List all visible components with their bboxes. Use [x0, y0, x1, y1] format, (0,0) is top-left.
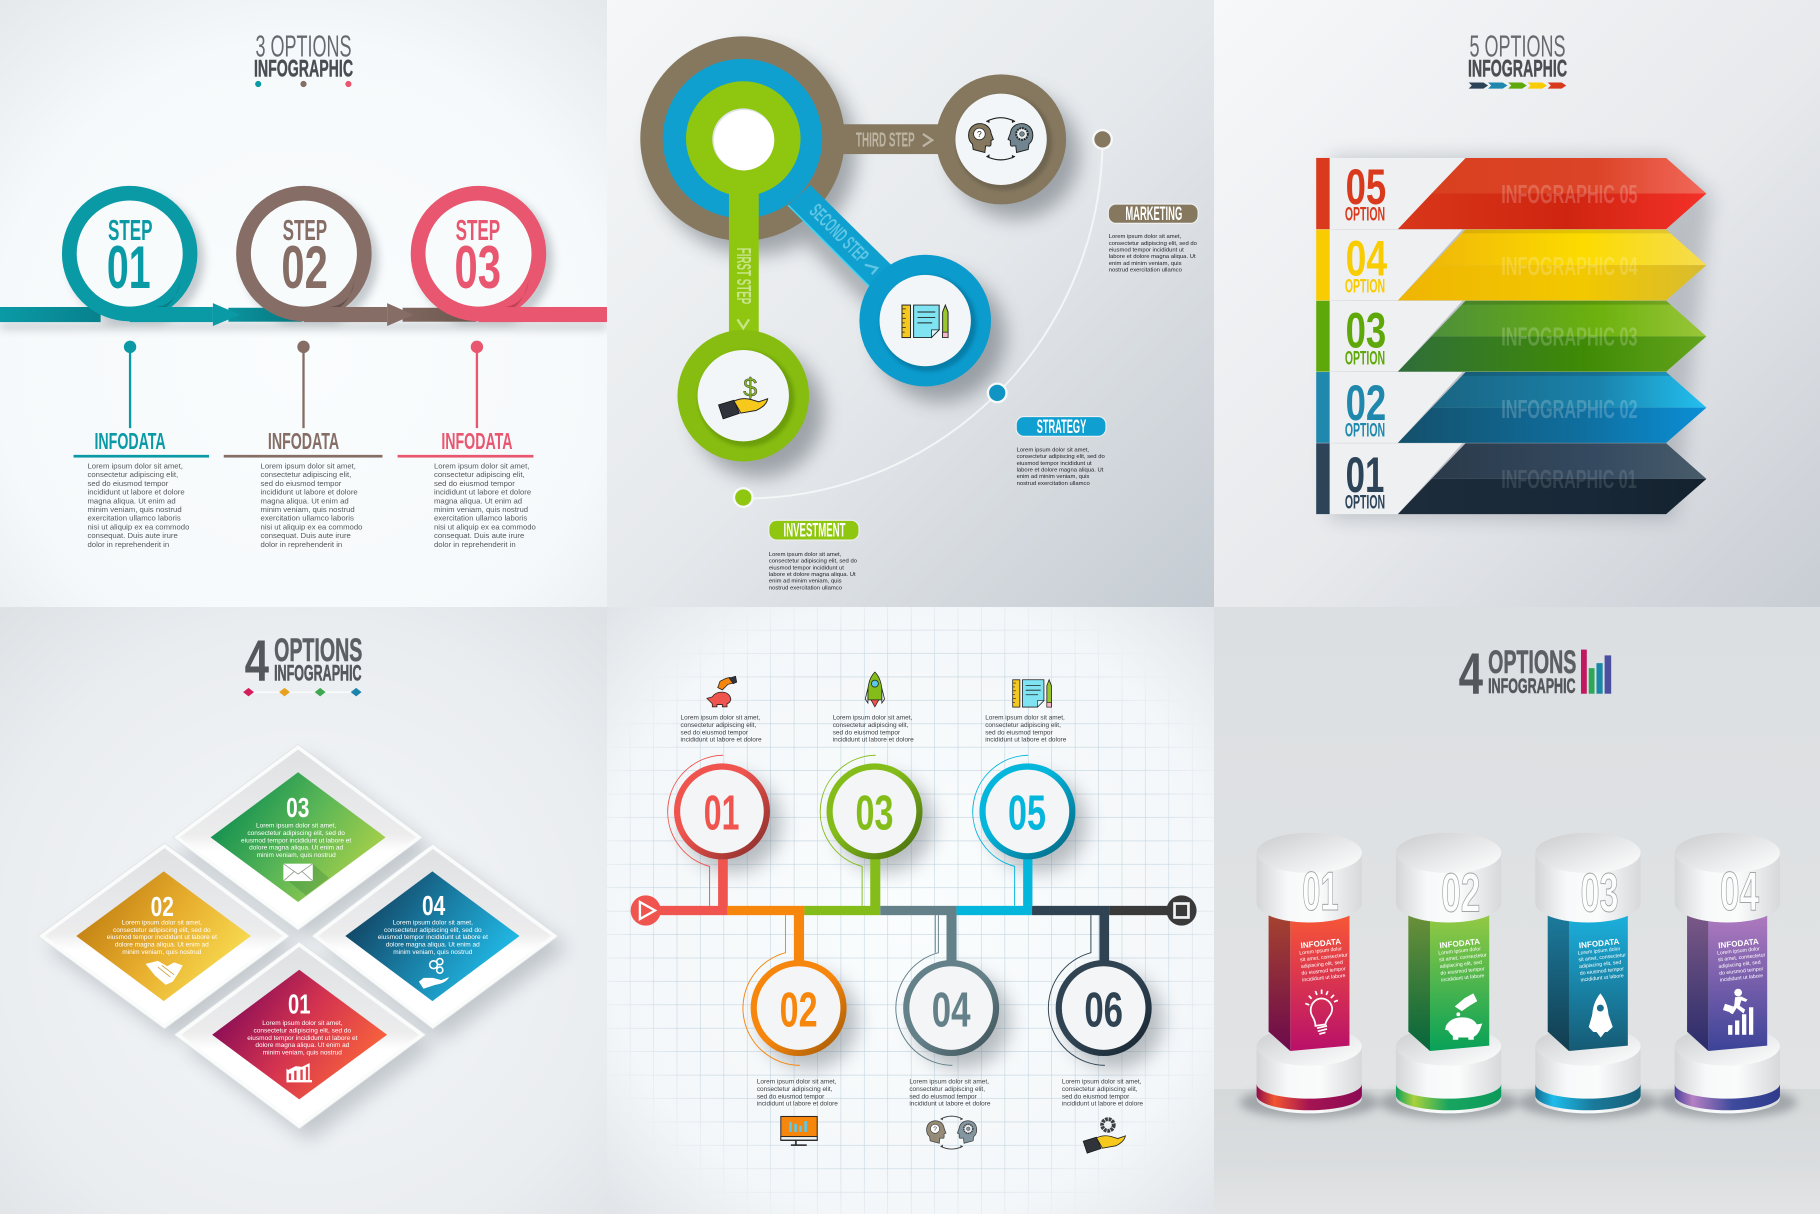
diamond 01: consectetur adipiscing elit, sed do — [254, 1027, 352, 1034]
cylinder 04: 04 — [1720, 860, 1759, 922]
label: strategy: eiusmod tempor incididunt ut — [1017, 461, 1092, 467]
title: 5 OPTIONS — [1469, 29, 1566, 64]
diamond 01 — [174, 942, 426, 1129]
label: marketing: MARKETING — [1125, 203, 1182, 225]
diamond 02: eiusmod tempor incididunt ut labore et — [107, 934, 217, 941]
captions bottom row: Lorem ipsum dolor sit amet, — [909, 1079, 989, 1086]
column: infodata 2: minim veniam, quis nostrud — [261, 505, 355, 514]
second step arm — [663, 59, 991, 386]
ribbon step 02: 02 — [281, 234, 328, 301]
icon: hand with dollar: $ — [743, 374, 757, 402]
panel: 4 options cylinders — [1214, 607, 1820, 1214]
column: infodata 1: incididunt ut labore et dolore — [87, 488, 185, 497]
ribbon step 01: STEP — [108, 215, 153, 247]
captions bottom row: sed do eiusmod tempor — [909, 1093, 978, 1100]
grid — [607, 607, 1214, 1214]
panel: 3 options infographic — [0, 0, 607, 607]
column: infodata 1: consequat. Duis aute irure — [87, 531, 178, 540]
row 01 — [1316, 443, 1706, 514]
ribbon step 02: STEP — [283, 215, 327, 247]
node 06 — [1048, 914, 1152, 1065]
captions bottom row: incididunt ut labore et dolore — [1062, 1101, 1143, 1108]
wall — [1214, 607, 1820, 1089]
captions top row: sed do eiusmod tempor — [681, 729, 749, 736]
row 05 — [1316, 158, 1706, 229]
row 04: 04 — [1346, 230, 1387, 287]
cylinder 01 — [1257, 833, 1362, 1113]
title: INFOGRAPHIC — [254, 56, 353, 83]
cylinder 03: 03 — [1581, 862, 1619, 924]
label: strategy: Lorem ipsum dolor sit amet, — [1017, 447, 1089, 453]
row 03 — [1316, 301, 1706, 372]
captions top row: Lorem ipsum dolor sit amet, — [833, 715, 913, 722]
row 01: OPTION — [1345, 492, 1385, 514]
column: infodata 3: consequat. Duis aute irure — [434, 531, 524, 540]
captions top row: incididunt ut labore et dolore — [833, 737, 914, 744]
stack shadow — [1330, 157, 1711, 519]
cylinder 02: INFODATA — [1439, 937, 1481, 950]
diamond 02 — [38, 843, 290, 1029]
label: investment: eiusmod tempor incididunt ut — [769, 565, 844, 571]
node 01: 01 — [704, 787, 739, 841]
drop shadows under the ribbon — [0, 200, 607, 326]
column: infodata 3 — [398, 341, 536, 549]
cylinder 02: 02 — [1441, 862, 1480, 924]
column: infodata 3: INFODATA — [441, 428, 513, 454]
cylinder 02: do eiusmod tempor — [1440, 966, 1485, 977]
cylinder 01: do eiusmod tempor — [1301, 966, 1346, 977]
column: infodata 2: sed do eiusmod tempor — [261, 479, 342, 488]
cylinder 01: sit amet, consectetur — [1300, 952, 1348, 963]
diamond 03 — [173, 744, 423, 930]
captions top row: incididunt ut labore et dolore — [681, 737, 762, 744]
background — [0, 607, 607, 1214]
first step arm: FIRST STEP — [732, 248, 754, 304]
column: infodata 2: consequat. Duis aute irure — [261, 531, 351, 540]
label: investment — [769, 520, 859, 591]
label: strategy: enim ad minim veniam, quis — [1017, 474, 1089, 480]
captions bottom row: sed do eiusmod tempor — [757, 1093, 825, 1100]
column: infodata 3: minim veniam, quis nostrud — [434, 505, 528, 514]
icon: hand with dollar — [718, 374, 768, 419]
panel: six step timeline — [607, 607, 1214, 1214]
column: infodata 2: nisi ut aliquip ex ea commodo — [261, 522, 362, 531]
title — [243, 629, 362, 696]
label: strategy: STRATEGY — [1037, 416, 1086, 438]
title: OPTIONS — [1488, 644, 1576, 680]
node 04: 04 — [932, 983, 971, 1037]
diamond 03: dolore magna aliqua. Ut enim ad — [249, 845, 344, 852]
diamond 03: 03 — [286, 792, 309, 823]
captions bottom row: consectetur adipiscing elit, — [1062, 1086, 1138, 1093]
column: infodata 3: exercitation ullamco laboris — [434, 514, 527, 523]
diamond 04: eiusmod tempor incididunt ut labore et — [378, 934, 488, 941]
captions bottom row: consectetur adipiscing elit, — [909, 1086, 985, 1093]
diamond 04: dolore magna aliqua. Ut enim ad — [386, 942, 480, 949]
first step arm — [677, 81, 809, 461]
diamond 01: Lorem ipsum dolor sit amet, — [262, 1020, 343, 1027]
captions bottom row: consectetur adipiscing elit, — [757, 1086, 833, 1093]
column: infodata 3: sed do eiusmod tempor — [434, 479, 515, 488]
column: infodata 1 — [74, 341, 209, 549]
label: marketing: eiusmod tempor incididunt ut — [1109, 247, 1184, 253]
curved connector — [743, 139, 1103, 499]
cylinder 01: adipiscing elit, sed — [1301, 960, 1343, 970]
cylinder 04 — [1675, 833, 1780, 1113]
background — [607, 607, 1214, 1214]
node 03: 03 — [856, 787, 893, 841]
title: INFOGRAPHIC — [274, 661, 362, 686]
diamond 03: minim veniam, quis nostrud — [257, 852, 336, 859]
ribbon step 03 — [418, 193, 607, 322]
icon: light bulb — [1305, 989, 1338, 1034]
column: infodata 3: nisi ut aliquip ex ea commodo — [434, 522, 536, 531]
label: marketing: consectetur adipiscing elit, sed do — [1109, 241, 1198, 247]
icon: hand with gear — [1083, 1119, 1125, 1153]
row 02 — [1316, 372, 1706, 443]
column: infodata 3: magna aliqua. Ut enim ad — [434, 496, 522, 505]
column: infodata 2 — [224, 341, 382, 549]
column: infodata 1: INFODATA — [94, 428, 166, 454]
title — [1468, 29, 1567, 89]
cylinder 01: incididunt ut labore — [1302, 973, 1346, 984]
title: 4 — [1459, 642, 1483, 707]
column: infodata 2: INFODATA — [268, 428, 339, 454]
column: infodata 1: nisi ut aliquip ex ea commodo — [87, 522, 189, 531]
cylinder 04: do eiusmod tempor — [1719, 966, 1764, 977]
panel: 4 options diamonds — [0, 607, 607, 1214]
cylinder 03 — [1535, 833, 1641, 1113]
row 05: INFOGRAPHIC 05 — [1501, 179, 1638, 209]
captions bottom row: Lorem ipsum dolor sit amet, — [1062, 1079, 1142, 1086]
row 03: OPTION — [1345, 347, 1385, 369]
captions bottom row: Lorem ipsum dolor sit amet, — [757, 1079, 837, 1086]
diamond 04 — [312, 844, 558, 1029]
node 05: 05 — [1008, 787, 1046, 841]
row 03: 03 — [1346, 302, 1386, 359]
cylinder 03: INFODATA — [1578, 937, 1620, 950]
captions top row: consectetur adipiscing elit, — [833, 722, 909, 729]
diamond 01: dolore magna aliqua. Ut enim ad — [255, 1042, 350, 1049]
floor — [1214, 1089, 1820, 1214]
column: infodata 1: dolor in reprehenderit in — [87, 540, 169, 549]
cylinder 04: INFODATA — [1718, 937, 1759, 950]
row 05: 05 — [1346, 158, 1386, 215]
icon: heads — [927, 1116, 977, 1149]
label: marketing: labore et dolore magna aliqua. Ut — [1109, 254, 1196, 260]
timeline dots — [734, 130, 1112, 507]
ribbon step 03: 03 — [454, 234, 501, 301]
icon: notebook — [1013, 680, 1051, 707]
cylinder 01: INFODATA — [1300, 937, 1342, 950]
icon: notebook — [902, 305, 948, 338]
cylinder 03: Lorem ipsum dolor — [1577, 946, 1621, 957]
cylinder 04: incididunt ut labore — [1720, 973, 1764, 984]
row 01: INFOGRAPHIC 01 — [1501, 464, 1637, 494]
diamond 04: Lorem ipsum dolor sit amet, — [393, 919, 473, 926]
third step arm: THIRD STEP — [856, 129, 915, 151]
second step arm: SECOND STEP — [805, 200, 872, 268]
cylinder 02: adipiscing elit, sed — [1440, 960, 1482, 970]
concentric hub shadow — [652, 51, 1079, 477]
title: OPTIONS — [274, 632, 362, 668]
captions top row: sed do eiusmod tempor — [985, 729, 1054, 736]
icon: monitor — [781, 1116, 817, 1145]
row 02: OPTION — [1345, 420, 1385, 442]
diamond 02: consectetur adipiscing elit, sed do — [113, 927, 211, 934]
floor shadows — [1240, 1087, 1797, 1118]
captions top row: incididunt ut labore et dolore — [985, 737, 1067, 744]
title: INFOGRAPHIC — [1468, 56, 1567, 83]
label: investment: consectetur adipiscing elit, sed do — [769, 559, 858, 565]
label: strategy: nostrud exercitation ullamco — [1017, 481, 1090, 487]
label: investment: labore et dolore magna aliqua. Ut — [769, 572, 856, 578]
diamond 04: minim veniam, quis nostrud — [393, 949, 473, 956]
captions bottom row: incididunt ut labore et dolore — [909, 1101, 991, 1108]
captions top row: consectetur adipiscing elit, — [681, 722, 756, 729]
icon: heads — [969, 118, 1033, 160]
cylinder 04: Lorem ipsum dolor — [1717, 946, 1760, 957]
row 03: INFOGRAPHIC 03 — [1501, 322, 1638, 352]
icon: rocket — [1589, 993, 1613, 1037]
column: infodata 3: incididunt ut labore et dolore — [434, 488, 531, 497]
node 05 — [973, 755, 1075, 907]
diamond 03: consectetur adipiscing elit, sed do — [247, 830, 345, 837]
diamond 01: minim veniam, quis nostrud — [263, 1050, 342, 1057]
icon: runner and bars — [1723, 989, 1753, 1035]
column: infodata 3: dolor in reprehenderit in — [434, 540, 516, 549]
column: infodata 2: exercitation ullamco laboris — [261, 514, 354, 523]
column: infodata 2: magna aliqua. Ut enim ad — [261, 496, 349, 505]
diamond shadows — [48, 756, 568, 1140]
third step arm — [640, 36, 1066, 241]
node 03 — [820, 755, 923, 907]
label: marketing: Lorem ipsum dolor sit amet, — [1109, 234, 1182, 240]
diamond 02: Lorem ipsum dolor sit amet, — [122, 919, 202, 926]
diamond 04: consectetur adipiscing elit, sed do — [384, 927, 482, 934]
background — [607, 0, 1214, 607]
row 01: 01 — [1346, 446, 1384, 503]
node shadows — [684, 775, 1163, 1069]
captions top row: Lorem ipsum dolor sit amet, — [985, 715, 1065, 722]
background — [1214, 0, 1820, 607]
panel: 5 options arrows — [1214, 0, 1820, 607]
node 01 — [668, 755, 770, 907]
title: 3 OPTIONS — [255, 29, 352, 64]
node 04 — [896, 914, 999, 1065]
row 04: INFOGRAPHIC 04 — [1501, 251, 1638, 281]
column: infodata 2: consectetur adipiscing elit, — [261, 470, 351, 479]
title — [254, 29, 353, 87]
label: marketing: enim ad minim veniam, quis — [1109, 261, 1182, 267]
captions top row: sed do eiusmod tempor — [833, 729, 901, 736]
title — [1459, 642, 1611, 707]
column: infodata 1: exercitation ullamco laboris — [87, 514, 181, 523]
row 02: 02 — [1346, 374, 1386, 431]
cylinder 03: adipiscing elit, sed — [1579, 960, 1622, 970]
timeline — [631, 895, 1197, 926]
panel: three step circles — [607, 0, 1214, 607]
cylinder 01: 01 — [1302, 860, 1339, 922]
cylinder 02 — [1396, 833, 1501, 1113]
cylinder 03: incididunt ut labore — [1580, 973, 1624, 984]
diamond 04: 04 — [422, 890, 446, 921]
cylinder 01: Lorem ipsum dolor — [1299, 946, 1343, 957]
label: marketing: nostrud exercitation ullamco — [1109, 268, 1183, 274]
row 02: INFOGRAPHIC 02 — [1501, 394, 1638, 424]
row 04: OPTION — [1345, 275, 1385, 297]
diamond 02: dolore magna aliqua. Ut enim ad — [115, 942, 209, 949]
cylinder 02: sit amet, consectetur — [1439, 952, 1487, 963]
diamond 01: eiusmod tempor incididunt ut labore et — [247, 1035, 358, 1042]
column: infodata 1: consectetur adipiscing elit, — [87, 470, 178, 479]
column: infodata 2: Lorem ipsum dolor sit amet, — [261, 461, 356, 470]
label: strategy: consectetur adipiscing elit, sed do — [1017, 454, 1105, 460]
captions bottom row — [757, 1079, 1143, 1108]
label: strategy: labore et dolore magna aliqua. Ut — [1017, 467, 1104, 473]
title: INFOGRAPHIC — [1488, 673, 1576, 698]
column: infodata 2: dolor in reprehenderit in — [261, 540, 342, 549]
column: infodata 1: Lorem ipsum dolor sit amet, — [87, 461, 183, 470]
node 06: 06 — [1084, 983, 1123, 1037]
captions top row: Lorem ipsum dolor sit amet, — [681, 715, 760, 722]
column: infodata 3: consectetur adipiscing elit, — [434, 470, 525, 479]
label: investment: enim ad minim veniam, quis — [769, 579, 842, 585]
label: investment: nostrud exercitation ullamco — [769, 585, 843, 591]
title: 4 — [245, 629, 269, 694]
diamond 02: 02 — [151, 891, 174, 922]
label: marketing — [1108, 203, 1198, 274]
icon: rocket — [865, 672, 885, 707]
column: infodata 1: sed do eiusmod tempor — [87, 479, 169, 488]
icon: piggy with hand — [1445, 993, 1482, 1040]
row 05: OPTION — [1345, 204, 1385, 226]
cylinder 02: Lorem ipsum dolor — [1438, 946, 1482, 957]
node 02: 02 — [780, 983, 818, 1037]
ribbon step 01 — [0, 193, 302, 326]
label: investment: INVESTMENT — [784, 520, 846, 542]
cylinder 04: sit amet, consectetur — [1718, 952, 1766, 963]
diamond 03: eiusmod tempor incididunt ut labore et — [241, 837, 351, 844]
column: infodata 1: minim veniam, quis nostrud — [87, 505, 182, 514]
node 02 — [743, 914, 847, 1065]
label: investment: Lorem ipsum dolor sit amet, — [769, 552, 842, 558]
ribbon step 02 — [243, 193, 476, 326]
cylinder 02: incididunt ut labore — [1441, 973, 1485, 984]
cylinder 03: sit amet, consectetur — [1578, 952, 1627, 963]
column: infodata 3: Lorem ipsum dolor sit amet, — [434, 461, 529, 470]
cylinder 04: adipiscing elit, sed — [1718, 960, 1761, 970]
captions top row — [681, 715, 1067, 744]
diamond 01: 01 — [288, 988, 310, 1019]
captions top row: consectetur adipiscing elit, — [985, 722, 1061, 729]
captions bottom row: sed do eiusmod tempor — [1062, 1093, 1130, 1100]
background — [0, 0, 607, 607]
icon: piggy bank — [707, 676, 737, 707]
ribbon step 01: 01 — [107, 234, 151, 301]
label: strategy — [1016, 416, 1106, 487]
diamond 02: minim veniam, quis nostrud — [122, 949, 202, 956]
diamond 03: Lorem ipsum dolor sit amet, — [256, 823, 336, 830]
captions bottom row: incididunt ut labore et dolore — [757, 1101, 838, 1108]
column: infodata 1: magna aliqua. Ut enim ad — [87, 496, 176, 505]
row 04 — [1316, 230, 1706, 300]
column: infodata 2: incididunt ut labore et dolore — [261, 488, 358, 497]
cylinder 03: do eiusmod tempor — [1580, 966, 1625, 977]
ribbon step 03: STEP — [456, 215, 500, 247]
